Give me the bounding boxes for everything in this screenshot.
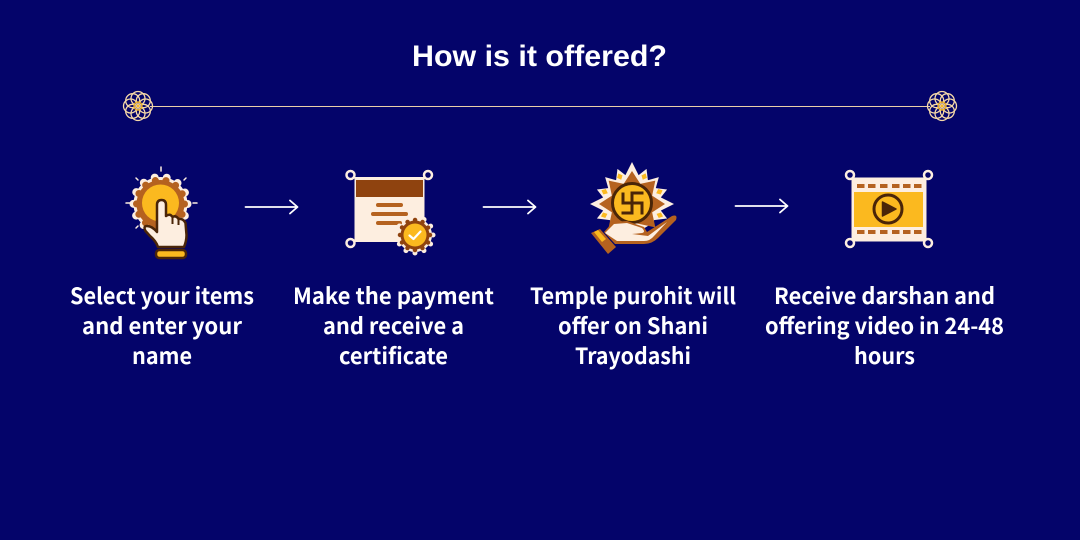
- step 2 label: [293, 279, 495, 371]
- ornamental divider: [124, 92, 956, 120]
- arrow 1: [246, 200, 298, 214]
- title: How is it offered?: [412, 40, 667, 73]
- step 1 label: name: [132, 339, 192, 371]
- step 4 label: Receive darshan and: [774, 279, 995, 311]
- step 4 icon: video film strip: [846, 171, 932, 247]
- step 2 label: certificate: [339, 339, 448, 371]
- step 3 icon: offering hand: [590, 162, 676, 254]
- step 3 label: Temple purohit will: [530, 279, 736, 311]
- step 1 label: [70, 279, 254, 371]
- step 3 label: [530, 279, 736, 371]
- step 2 icon: certificate: [346, 171, 433, 253]
- step 4 label: offering video in 24-48: [765, 309, 1004, 341]
- step 3 label: offer on Shani: [558, 309, 708, 341]
- step 1 icon: tapping hand: [126, 167, 197, 258]
- step 4 label: hours: [854, 339, 915, 371]
- arrow 3: [736, 200, 788, 212]
- step 2 label: and receive a: [323, 309, 464, 341]
- step 1 label: Select your items: [70, 279, 254, 311]
- step 4 label: [765, 279, 1004, 371]
- arrow 2: [484, 200, 536, 214]
- step 3 label: Trayodashi: [575, 339, 691, 371]
- step 1 label: and enter your: [82, 309, 242, 341]
- step 2 label: Make the payment: [293, 279, 495, 311]
